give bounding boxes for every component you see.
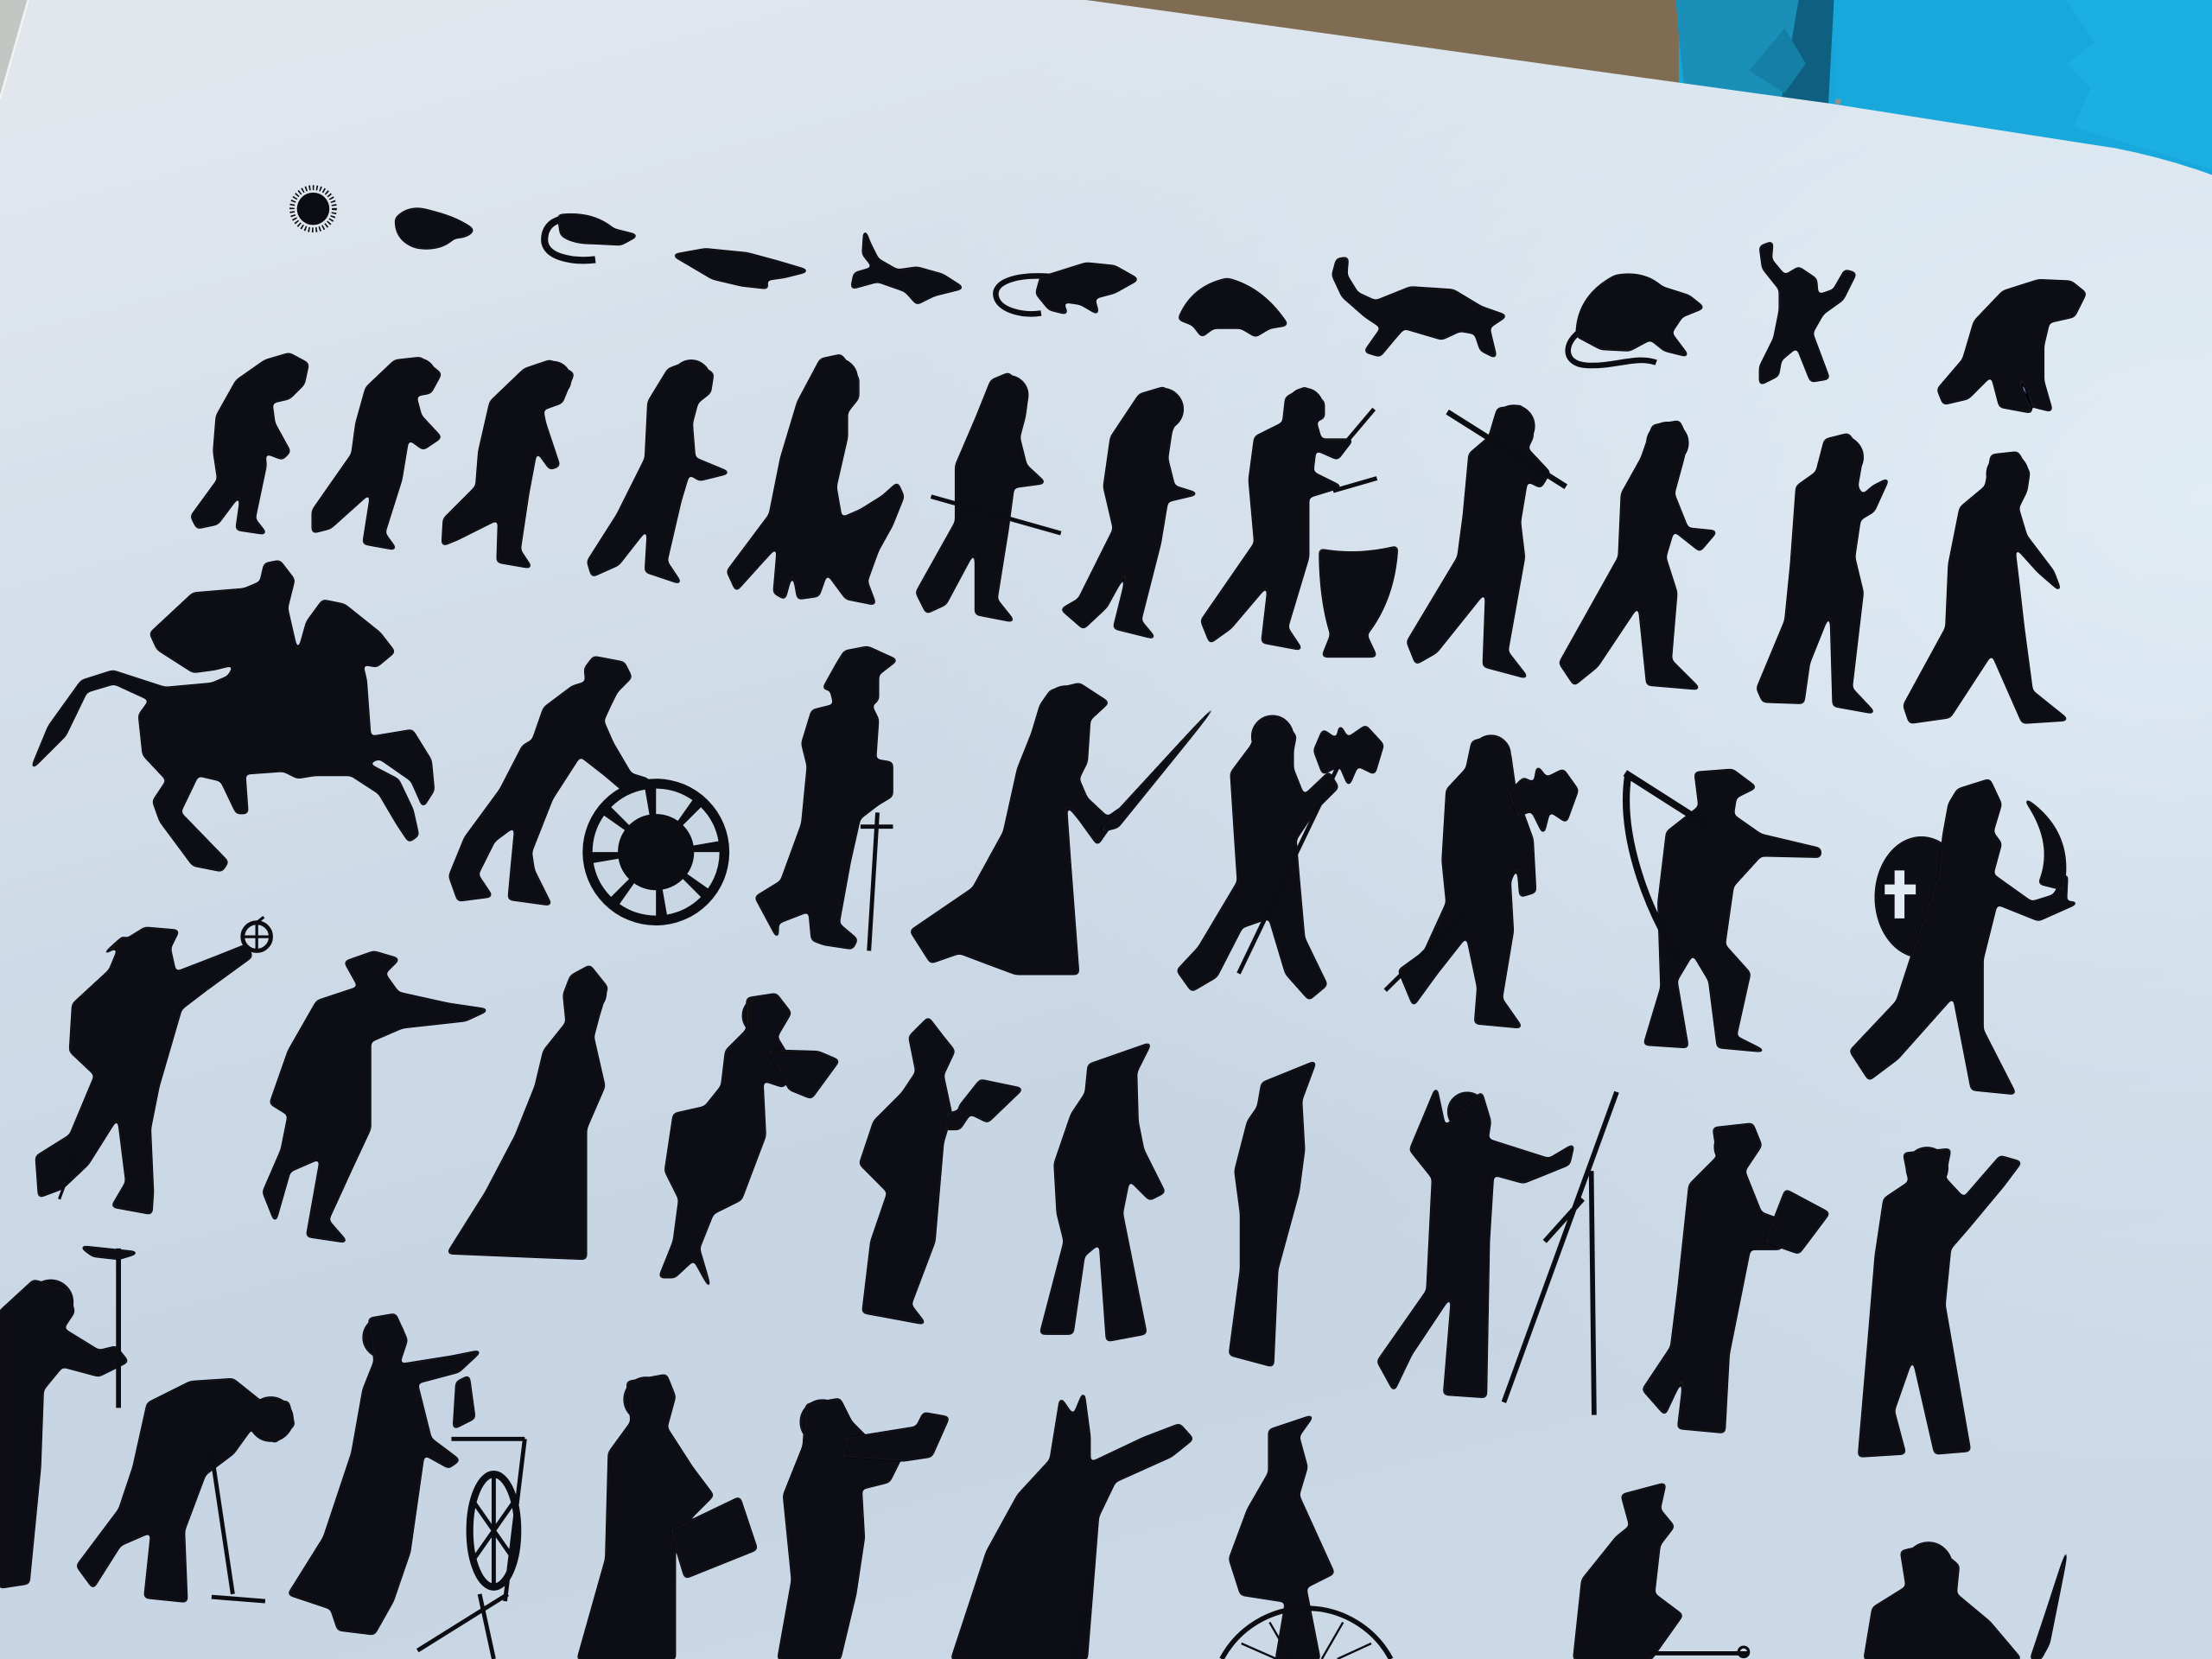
icon: early ape man <box>192 354 308 533</box>
icon: hominid walking in sandals <box>1062 388 1196 638</box>
icon: man pushing wheel <box>450 658 729 925</box>
row 2: hominids <box>192 354 2067 722</box>
row 1: early life forms <box>292 188 2085 412</box>
icon: horse and rider <box>33 562 433 870</box>
icon: lady with fan <box>660 995 838 1287</box>
icon: second axeman <box>1385 736 1577 1027</box>
icon: ape on four limbs <box>1938 281 2085 412</box>
icon: hominid with wolf <box>728 355 903 604</box>
icon: hedgehog <box>1179 279 1287 336</box>
icon: axeman <box>1178 716 1382 999</box>
icon: guard with tall hat <box>1041 1044 1164 1340</box>
icon: hominid with tool <box>588 361 728 582</box>
icon: miner with pick <box>0 1247 137 1587</box>
icon: lizard <box>995 264 1137 314</box>
icon: Roman soldier <box>756 647 896 950</box>
icon: helmeted man with sabre <box>1865 1543 2067 1659</box>
icon: cat-like mammal <box>1333 258 1505 357</box>
icon: man in top hat <box>1574 1484 1749 1659</box>
icon: man reading book <box>1643 1124 1828 1432</box>
icon: monkey <box>1761 243 1855 384</box>
icon: second guard <box>1230 1062 1315 1365</box>
icon: man on penny-farthing <box>1222 1416 1391 1659</box>
icon: hominid with spear <box>917 374 1061 620</box>
icon: man with scythe <box>1625 770 1820 1051</box>
icon: drummer <box>1202 388 1396 656</box>
icon: painter at easel <box>1378 1089 1617 1415</box>
icon: man with sextant <box>36 917 270 1213</box>
icon: modern walking man <box>1904 453 2067 722</box>
icon: trumpeter <box>779 1400 948 1659</box>
icon: man walking with raised arm <box>1859 1148 2020 1456</box>
icon: man with club on shoulder <box>1408 406 1566 677</box>
icon: blob organism <box>397 209 473 248</box>
icon: man pointing <box>264 952 486 1242</box>
row 4: historic trades and costumes <box>36 917 2020 1456</box>
icon: crouched hominid <box>313 359 440 549</box>
icon: worm <box>544 215 636 260</box>
icon: upright man, hand raised <box>1758 435 1887 712</box>
icon: lady in bustle dress <box>448 966 607 1258</box>
icon: bishop with crozier <box>952 1394 1192 1659</box>
icon: woman at spinning wheel <box>289 1315 524 1659</box>
icon: rat <box>1568 275 1703 365</box>
icon: bent worker with pick <box>78 1380 294 1601</box>
icon: stooped hominid <box>443 361 573 567</box>
background: table and blue object <box>0 0 2212 178</box>
icon: single cell <box>292 188 334 230</box>
icon: fish-like creature <box>674 250 807 288</box>
icon: Roman woman with sword <box>912 684 1213 974</box>
icon: newt <box>852 232 962 303</box>
row 5: labourers and later figures <box>0 1247 2067 1659</box>
icon: geisha with fan <box>861 1019 1021 1323</box>
icon: man with knife <box>1560 422 1715 689</box>
icon: man with briefcase <box>578 1376 756 1659</box>
icon: crusader with shield <box>1851 780 2076 1093</box>
row 3: riders and warriors <box>33 562 2076 1093</box>
